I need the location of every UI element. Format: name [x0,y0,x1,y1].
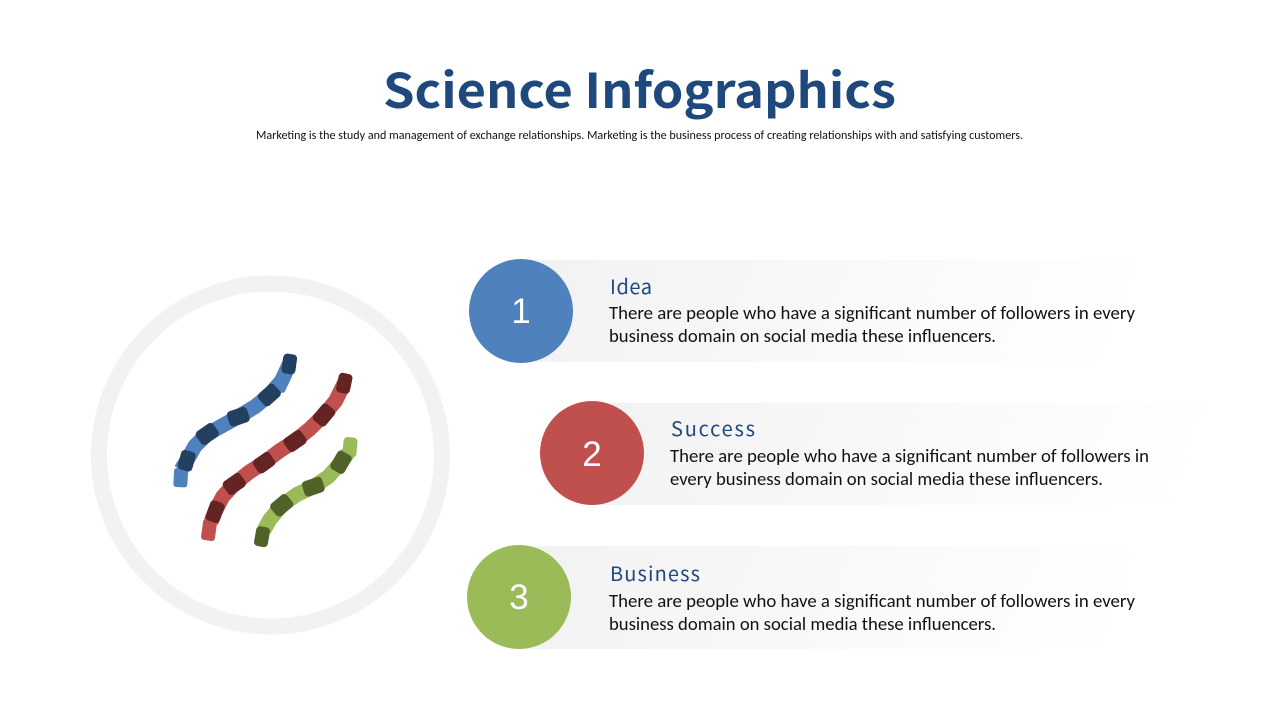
body text [609,301,1136,347]
icon: green strand [253,437,358,548]
icon: number circle 1 [469,259,573,363]
subtitle: Marketing is the study and management of exchange relationships. Marketing is the business process of creating relationships with and satisfying customers. [256,129,1023,143]
body text [670,444,1149,490]
body text: There are people who have a significant number of followers in [670,444,1149,467]
heading: Success [671,413,755,442]
body text: There are people who have a significant number of followers in every [609,301,1136,324]
panel: business [467,545,1136,649]
heading: Business [610,558,700,587]
title: Science Infographics [383,52,896,122]
bar [519,546,1129,649]
bar [521,260,1131,362]
body text: every business domain on social media these influencers. [670,467,1103,490]
panel: idea [469,259,1136,363]
body text: business domain on social media these influencers. [609,612,996,635]
number 3: 3 [509,578,529,617]
body text: business domain on social media these influencers. [609,324,996,347]
number 2: 2 [582,435,602,474]
icon: number circle 2 [540,401,644,505]
bar [592,403,1202,505]
panel: success [540,401,1202,505]
panel: illustration [99,284,442,626]
body text: There are people who have a significant number of followers in every [609,589,1136,612]
number 1: 1 [511,292,531,331]
icon: number circle 3 [467,545,571,649]
body text [609,589,1136,635]
heading: Idea [610,271,652,300]
icon: blue strand [173,353,298,488]
ring [99,284,442,626]
icon: red strand [201,372,353,541]
